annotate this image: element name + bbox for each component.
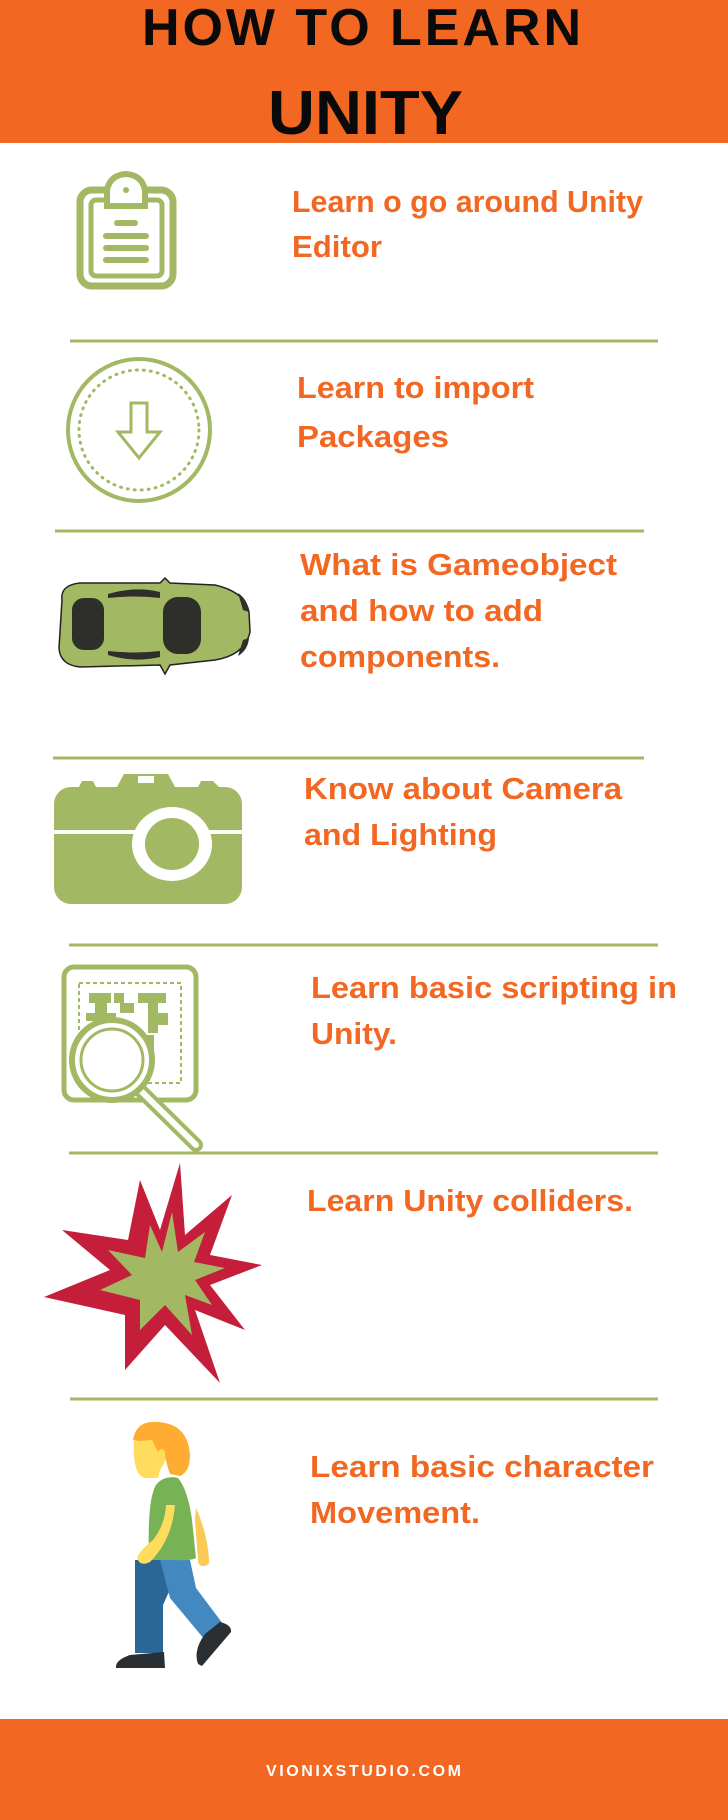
text: step 1: Learn o go around Unity <box>292 184 644 219</box>
text: step 4: and Lighting <box>304 817 497 852</box>
text: step 1: Editor <box>292 229 382 264</box>
title line 2: UNITY <box>268 79 463 148</box>
title line 1: HOW TO LEARN <box>142 0 587 57</box>
icon: clipboard <box>80 174 173 286</box>
text: step 2: Learn to import <box>297 370 534 405</box>
text: step 2: Packages <box>297 419 449 454</box>
icon: walking person <box>116 1422 231 1668</box>
text: step 4 <box>304 771 623 852</box>
text: step 3: components. <box>300 639 500 674</box>
footer text: VIONIXSTUDIO.COM <box>266 1763 463 1780</box>
text: step 3: What is Gameobject <box>300 547 617 582</box>
text: step 2 <box>297 370 534 454</box>
header band <box>0 0 728 143</box>
text: step 5 <box>311 970 677 1051</box>
text: step 7: Learn basic character <box>310 1449 654 1484</box>
text: step 7 <box>310 1449 654 1530</box>
icon: starburst <box>44 1163 262 1383</box>
text: step 7: Movement. <box>310 1495 480 1530</box>
text: step 3 <box>300 547 617 674</box>
text: step 4: Know about Camera <box>304 771 623 806</box>
icon: download circle <box>68 359 210 501</box>
text: step 5: Unity. <box>311 1016 397 1051</box>
footer band <box>0 1719 728 1820</box>
text: step 5: Learn basic scripting in <box>311 970 677 1005</box>
text: step 3: and how to add <box>300 593 543 628</box>
icon: camera <box>54 774 242 904</box>
icon: car <box>59 578 250 674</box>
text: step 1 <box>292 184 644 264</box>
icon: QR magnifier <box>64 967 196 1145</box>
text: step 6: Learn Unity colliders. <box>307 1183 633 1218</box>
